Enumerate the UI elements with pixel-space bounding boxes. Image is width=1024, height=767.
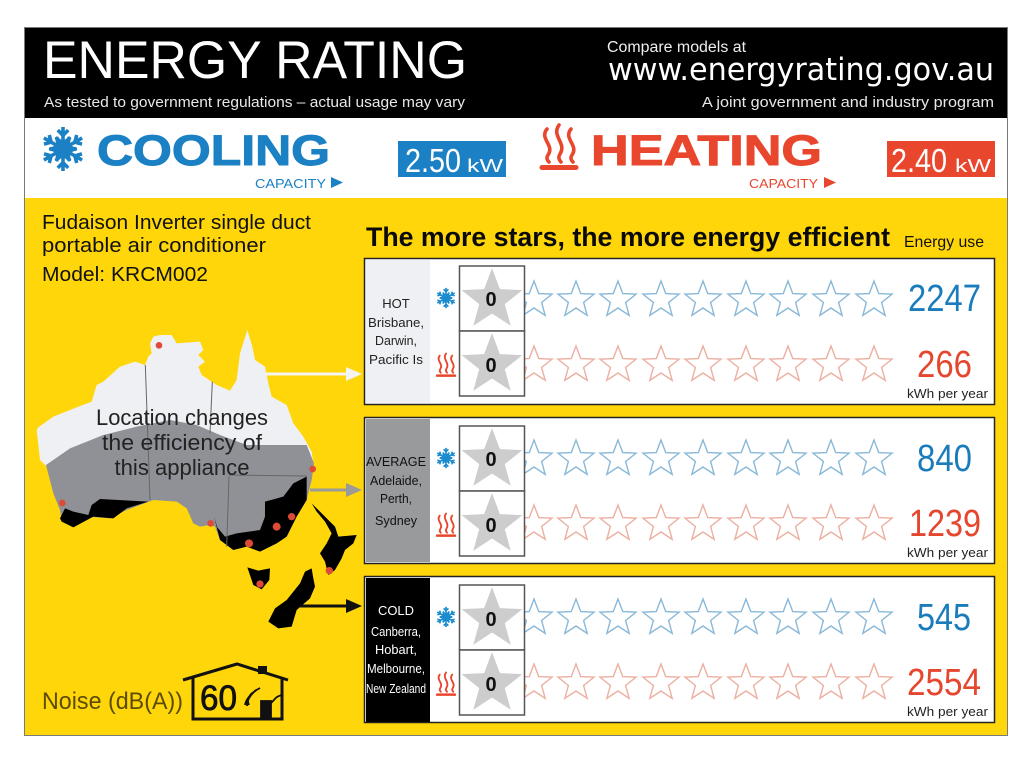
average label xyxy=(366,419,430,562)
compare models text: Compare models at xyxy=(607,39,747,56)
panel: hot climate xyxy=(364,258,994,404)
hot zone xyxy=(37,330,314,480)
icon: heating xyxy=(437,673,455,695)
heating star rating: 0 xyxy=(485,355,497,377)
sound waves and appliance xyxy=(245,688,283,718)
title: ENERGY RATING xyxy=(43,31,467,90)
cold zone: south east xyxy=(214,477,307,552)
product description: portable air conditioner xyxy=(42,235,266,257)
cooling star rating xyxy=(460,266,524,331)
heating star row xyxy=(516,505,892,539)
heating energy use: 1239 xyxy=(909,503,981,545)
cold label: Melbourne, xyxy=(367,662,425,676)
cold label: COLD xyxy=(378,604,414,618)
hot label: Darwin, xyxy=(375,333,417,348)
noise value: 60 xyxy=(200,679,237,718)
hot label: Brisbane, xyxy=(368,315,424,330)
heating energy use: 266 xyxy=(917,344,972,386)
average label: Sydney xyxy=(375,513,417,528)
subtitle: test conditions: As tested to government regulations – actual usage may vary xyxy=(44,95,466,111)
product description: Model: KRCM002 xyxy=(42,264,208,286)
cooling star rating: 0 xyxy=(485,289,497,311)
heating star row xyxy=(516,664,892,698)
cold zone: New Zealand south island xyxy=(268,568,315,628)
heating star row xyxy=(516,346,892,380)
cooling star rating xyxy=(460,426,524,491)
product description xyxy=(42,212,311,286)
cooling capacity value: 2.50 xyxy=(405,142,461,179)
arrow: average zone xyxy=(310,483,362,497)
heating capacity value xyxy=(887,141,995,179)
heating star rating: 0 xyxy=(485,515,497,537)
heating star rating: 0 xyxy=(485,674,497,696)
star headline: The more stars, the more energy efficient xyxy=(366,222,890,252)
heating capacity label: CAPACITY xyxy=(749,176,818,191)
cold label xyxy=(366,578,430,722)
energy unit: kWh per year xyxy=(907,705,988,719)
product description: Fudaison Inverter single duct xyxy=(42,212,311,234)
map: climate zones of Australia and New Zealand xyxy=(37,330,357,628)
icon: snowflake xyxy=(40,127,86,171)
program text: A joint government and industry program xyxy=(702,95,994,111)
heating energy use: 2554 xyxy=(907,662,981,704)
icon: heating xyxy=(437,354,455,376)
yellow panel xyxy=(25,198,1007,735)
map caption: this appliance xyxy=(114,455,250,480)
arrow: cold zone xyxy=(300,599,362,613)
energy unit: kWh per year xyxy=(907,546,988,560)
heating capacity value: kW xyxy=(955,156,991,176)
average label: AVERAGE xyxy=(366,454,426,469)
website url: www.energyrating.gov.au xyxy=(608,52,994,88)
capacity band xyxy=(40,125,995,191)
arrow: hot zone xyxy=(266,367,362,381)
map caption xyxy=(96,405,268,480)
cooling star row xyxy=(516,440,892,474)
average label: Adelaide, xyxy=(370,473,422,488)
cooling star rating xyxy=(460,585,524,650)
icon: cooling xyxy=(436,607,456,627)
cold zone: Tasmania xyxy=(247,567,270,589)
cold zone: south west xyxy=(60,499,148,527)
cooling capacity value: kW xyxy=(467,156,503,176)
state borders xyxy=(145,365,307,547)
energy unit: kWh per year xyxy=(907,387,988,401)
heating star rating xyxy=(460,331,524,396)
icon: cooling xyxy=(436,448,456,468)
heating star rating xyxy=(460,491,524,556)
cooling capacity value xyxy=(398,141,506,179)
energy use heading: Energy use xyxy=(904,234,984,251)
average zone xyxy=(46,420,314,552)
icon: cooling xyxy=(436,288,456,308)
cooling heading: COOLING xyxy=(97,127,330,175)
cooling energy use: 545 xyxy=(917,597,971,639)
cold zone: New Zealand north island xyxy=(312,503,357,575)
hot label: Pacific Is xyxy=(369,352,424,367)
heating capacity value: 2.40 xyxy=(891,142,947,179)
hot label xyxy=(366,260,430,403)
heating star rating xyxy=(460,650,524,715)
cold label: Canberra, xyxy=(371,625,421,639)
noise label: Noise (dB(A)) xyxy=(42,688,183,715)
cooling star rating: 0 xyxy=(485,609,497,631)
icon: heating xyxy=(437,514,455,536)
cold label: New Zealand xyxy=(366,682,426,696)
cold label: Hobart, xyxy=(375,643,417,657)
map caption: Location changes xyxy=(96,405,268,430)
icon: heat waves xyxy=(542,125,576,168)
cooling star row xyxy=(516,599,892,633)
cooling capacity label: CAPACITY xyxy=(255,176,326,191)
city markers xyxy=(59,342,333,588)
cooling energy use: 840 xyxy=(917,438,972,480)
panel: cold climate xyxy=(364,576,994,722)
map caption: the efficiency of xyxy=(102,430,263,455)
cooling star rating: 0 xyxy=(485,449,497,471)
heating heading: HEATING xyxy=(591,127,822,175)
icon: house with noise rating xyxy=(183,664,288,719)
cooling energy use: 2247 xyxy=(908,278,981,320)
average label: Perth, xyxy=(380,491,412,506)
cooling star row xyxy=(516,281,892,315)
panel: average climate xyxy=(364,418,994,564)
hot label: HOT xyxy=(382,296,410,311)
header band xyxy=(25,28,1007,118)
